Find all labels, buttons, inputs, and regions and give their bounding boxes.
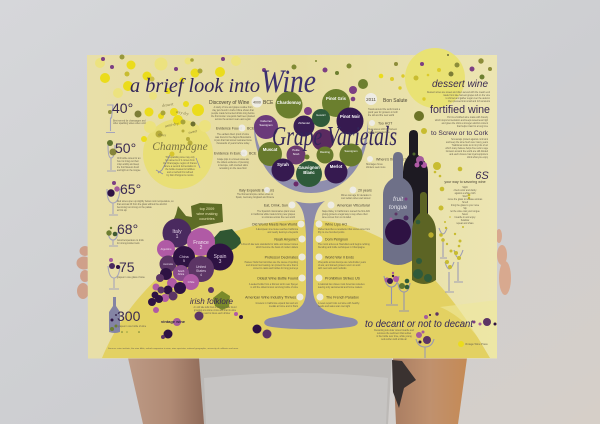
champagne section: dessert bbox=[162, 101, 175, 108]
temperature: 50 degrees: 50° bbox=[115, 140, 136, 156]
timeline: upper right near glass: Heat waves shift the harvest bbox=[368, 128, 397, 131]
timeline: left of stem: A European vine louse reaches California bbox=[256, 228, 299, 231]
timeline: left of stem bbox=[236, 187, 306, 308]
left hand bbox=[76, 246, 92, 299]
timeline: earliest wine history: The earliest direct proof of wine bbox=[217, 133, 250, 136]
timeline: upper right near glass: earlier across Europe bbox=[368, 131, 391, 134]
temperature: 50 degrees: Chill white wines for an bbox=[117, 157, 141, 160]
title: Wine bbox=[261, 64, 316, 100]
scattered bubbles top left bbox=[95, 54, 241, 156]
grape bubble: Petite Sirah: Sirah bbox=[293, 152, 300, 156]
green bottle bbox=[412, 192, 436, 284]
tasting chart on grey bottle: tongue bbox=[389, 205, 408, 211]
grape cluster of wine producing countries: Africa bbox=[178, 273, 185, 276]
timeline: right of stem: The monk arrives at Hautvillers and begins refining bbox=[318, 243, 370, 246]
timeline: earliest wine history: in Europe, with crushed skins bbox=[218, 164, 249, 167]
section: to screw or to cork: and keep the wine fresh over many years bbox=[446, 141, 489, 144]
temperature: 40 degrees: Best served for champagne and bbox=[113, 120, 146, 122]
timeline: upper right near glass: Shortages hit as bbox=[366, 163, 383, 166]
grape cluster of wine producing countries: South bbox=[178, 270, 185, 273]
decanting glass bbox=[416, 330, 434, 358]
grape cluster of wine producing countries: 2 bbox=[200, 245, 203, 251]
timeline: earliest wine history: in jars that had stored resinated wine bbox=[214, 139, 252, 142]
temperature: 65 degrees: becoming too strong on the palate bbox=[117, 206, 152, 209]
grape bubble: Cabernet Sauvignon: Cabernet bbox=[260, 119, 272, 123]
timeline: earliest wine history: clay jars found in Jiahu China shows that bbox=[212, 109, 254, 112]
section: 6S tasting steps: Sight bbox=[462, 186, 468, 189]
grape bubble: Sauvignon Blanc bbox=[296, 161, 322, 187]
grape cluster of wine producing countries: States bbox=[196, 269, 206, 273]
timeline: right of stem: blending and bottle techniques in Champagne bbox=[318, 246, 365, 249]
timeline: upper right near glass: Too HOT bbox=[378, 122, 393, 126]
champagne section: sweet bbox=[188, 128, 198, 135]
timeline: left of stem: Pasteur finds that microbes are the cause of spoiling bbox=[245, 261, 299, 264]
champagne section: doux bbox=[158, 131, 167, 138]
grape bubble: Pinot Noir bbox=[336, 108, 364, 134]
timeline: right of stem: American Viticultural bbox=[337, 204, 370, 208]
timeline: left of stem: A French law sets standards for table and dessert wines bbox=[241, 243, 299, 246]
timeline: earliest wine history: remaining on the cave floor bbox=[219, 167, 247, 170]
right hand bbox=[496, 229, 511, 295]
timeline: left of stem: and nearly destroys vineyards bbox=[267, 231, 299, 234]
timeline: right of stem: giving growers a legal way to say where their bbox=[322, 213, 368, 216]
temperature: 65 degrees: Red wines open up slightly below room temperature, so bbox=[117, 200, 174, 203]
temperature: 50 degrees: and light on the tongue bbox=[117, 169, 141, 172]
green bottle dots bbox=[413, 220, 434, 282]
section: fortified wine: which stops fermentation and keeps sweetness high bbox=[435, 119, 489, 122]
timeline: earliest wine history: BCE bbox=[247, 126, 255, 130]
section: 6S tasting steps: Sip bbox=[463, 208, 467, 210]
red wine glasses bbox=[384, 272, 410, 311]
grape bubble: Muscat: Muscat bbox=[263, 147, 278, 152]
section: to decant or not to decant bbox=[365, 312, 496, 341]
temperature: 75 degrees: 75 bbox=[119, 259, 135, 275]
timeline: left of stem: and shows how heating can protect the wine that is bbox=[246, 264, 299, 267]
grape bubble: Riesling: Riesling bbox=[320, 150, 330, 154]
grape bubble: Merlot: Merlot bbox=[330, 164, 343, 169]
timeline: earliest wine history: Discovery of Wine bbox=[209, 100, 250, 106]
grape bubble: Cabernet Sauvignon: Sauvignon bbox=[259, 123, 273, 127]
grape cluster of wine producing countries: China bbox=[179, 255, 189, 259]
timeline: right of stem: Wine Lips HO bbox=[325, 222, 347, 226]
section: 6S tasting steps: against a white cloth bbox=[455, 192, 476, 195]
section: to screw or to cork: to Screw or to Cork bbox=[431, 130, 489, 137]
timeline: right of stem: The French Paradox bbox=[326, 296, 359, 300]
grape bubble: Petite Sirah bbox=[286, 146, 306, 164]
timeline: right of stem: Vineyards across Europe are rebuilt after years bbox=[318, 261, 367, 264]
timeline: right of stem: fifty to one hundred points bbox=[318, 231, 345, 234]
flower cluster bbox=[412, 152, 427, 168]
champagne pale yellow circle bbox=[143, 119, 213, 189]
timeline: right of stem: Prohibition Strikes US bbox=[325, 276, 361, 280]
section: irish folklore: was said to bless each drinker bbox=[200, 312, 231, 315]
temperature: 50 degrees: crisp acidity and keep bbox=[117, 163, 140, 166]
yellow hill background bbox=[102, 220, 490, 358]
title: a brief look into bbox=[130, 75, 260, 97]
temperature: 65 degrees bbox=[107, 181, 174, 215]
tattoo bbox=[392, 360, 416, 408]
grape cluster of wine producing countries: Argentina bbox=[161, 248, 172, 251]
tasting chart on grey bottle: fruit bbox=[393, 197, 403, 203]
temperature: 40 degrees: 40° bbox=[112, 100, 133, 116]
temperature: 40 degrees bbox=[106, 100, 146, 132]
section: 6S tasting steps: Smell bbox=[462, 202, 468, 204]
timeline: earliest wine history: Evidence in Europe bbox=[214, 152, 245, 156]
grape bubble: Muscat bbox=[258, 142, 282, 166]
section: 6S tasting steps bbox=[444, 170, 489, 225]
temperature: 68 degrees: for strong-bodied reds bbox=[117, 242, 140, 245]
section: 6S tasting steps: Savor bbox=[462, 213, 468, 216]
timeline: earliest wine history: across the ancient near east region bbox=[215, 118, 252, 121]
champagne section: the Champagne region of France bbox=[163, 162, 198, 165]
section: fortified wine bbox=[430, 104, 490, 128]
timeline: right of stem: 20 years bbox=[358, 188, 372, 192]
temperature: 68 degrees: 68° bbox=[117, 221, 138, 237]
logo mark bbox=[458, 341, 488, 347]
grape bubble: Syrah: Syrah bbox=[277, 162, 289, 167]
grape bubble: Pinot Gris: Pinot Gris bbox=[326, 96, 347, 101]
grape bubble: Chardonnay: Chardonnay bbox=[277, 100, 302, 105]
temperature: 50 degrees bbox=[107, 140, 141, 172]
timeline: left of stem: Eat, Drink, Sun bbox=[264, 204, 288, 208]
timeline: earliest wine history: people made fermented drinks long before bbox=[211, 112, 255, 115]
timeline: right of stem: with new tools and methods bbox=[318, 267, 347, 270]
timeline: right of stem: A national ban closes most American wineries bbox=[318, 283, 365, 286]
timeline: right of stem: wine comes from on its label bbox=[322, 216, 351, 219]
section: to screw or to cork: which many believe helps fine reds to age bbox=[445, 147, 489, 150]
timeline: right of stem: A news report links red wine with healthy bbox=[318, 302, 360, 305]
timeline: right of stem: Wines can age for decades in bbox=[341, 194, 372, 197]
grape bubble: Zinfandel bbox=[294, 116, 314, 136]
poster sheet bbox=[87, 55, 497, 358]
champagne section: be named so if it comes from bbox=[165, 159, 195, 162]
timeline: upper right near glass bbox=[365, 93, 408, 169]
grape bubble: Sauvignon Blanc: Blanc bbox=[303, 170, 315, 175]
grape bubble: Pinot Noir: Pinot Noir bbox=[340, 114, 360, 119]
grape bubble: Sauvignon bbox=[340, 144, 362, 166]
bottle count: 300: 300 bbox=[117, 308, 141, 324]
section: vintage wine: vintage wine bbox=[161, 319, 186, 324]
grape bubble: Petite Sirah: Petite bbox=[292, 148, 300, 152]
section: to screw or to cork: Growers around the world are still divided bbox=[446, 150, 489, 153]
timeline: left of stem: The Roman Empire carries vines to bbox=[237, 193, 274, 196]
timeline: left of stem: which become the basis of modern labels bbox=[256, 246, 299, 249]
section: 6S tasting steps: check color and clarity bbox=[454, 189, 477, 192]
timeline: left of stem: is still the oldest known surviving bottle of wine bbox=[251, 286, 299, 289]
grape cluster of wine producing countries: 4 bbox=[200, 273, 202, 277]
temperature: 40 degrees: other sparkling wines when cold bbox=[113, 122, 146, 125]
timeline: earliest wine history: Grape pips in a Greek cave are bbox=[217, 158, 250, 161]
timeline: earliest wine history: 4000 bbox=[253, 100, 261, 104]
timeline: right of stem: cool cellars when well stored bbox=[341, 197, 371, 200]
timeline: left of stem: Noah Anyone? bbox=[274, 238, 298, 242]
timeline: right of stem bbox=[316, 186, 372, 308]
grape bubble: Merlot bbox=[324, 160, 348, 184]
map: top wine making countries: countries bbox=[199, 217, 215, 221]
title bbox=[130, 64, 316, 100]
grape bubble: Riesling bbox=[316, 146, 334, 164]
temperature: 68 degrees bbox=[106, 221, 145, 246]
map: top wine making countries: wine making bbox=[196, 212, 218, 216]
champagne section: and a method first refined bbox=[167, 171, 194, 174]
timeline: upper right near glass: Toasts around the world mark a bbox=[368, 108, 401, 111]
timeline: left of stem: American Wine Industry Thrives bbox=[245, 296, 296, 300]
grey bottle bbox=[383, 152, 413, 265]
grape bubble: Syrah bbox=[272, 158, 294, 182]
timeline: earliest wine history: the oldest evidence of pressing bbox=[217, 161, 250, 164]
timeline: left of stem: The Spanish missionaries plant vines bbox=[257, 210, 296, 213]
champagne section: by Dom Pérignon's monks bbox=[167, 174, 194, 177]
grape bubble: Gewurztraminer: Gewürz bbox=[316, 113, 326, 117]
temperature: 65 degrees: at first sip bbox=[117, 209, 128, 212]
person: arms and shirt bbox=[128, 358, 467, 424]
timeline: right of stem: Parker launches a newsletter that scores wine from bbox=[318, 228, 370, 231]
grape bubble: Zinfandel: Zinfandel bbox=[298, 121, 310, 125]
grape cluster of wine producing countries: 3 bbox=[219, 259, 222, 265]
temperature: 50 degrees: the fruit flavours fresh bbox=[117, 166, 140, 169]
timeline: left of stem: Oldest Wine Bottle Found bbox=[257, 276, 298, 280]
section: 6S tasting steps: let the wine coat your tongue bbox=[450, 210, 480, 213]
grape bubble: Sauvignon Blanc: Sauvignon bbox=[298, 165, 320, 170]
map: top wine making countries bbox=[170, 203, 241, 256]
section: fortified wine: that helps it last for a long time bbox=[457, 125, 489, 128]
timeline: earliest wine history: BCE bbox=[249, 152, 257, 156]
section: to decant or not to decant: in the bottle over time, while young bbox=[376, 335, 412, 338]
section: 6S tasting steps: repeat and share bbox=[456, 222, 474, 225]
section: to decant or not to decant: removes the sediment that settles bbox=[377, 332, 412, 335]
grape bubble: Cabernet Sauvignon bbox=[254, 115, 278, 139]
grape bubble: centre bbox=[312, 129, 334, 151]
loose grapes lower centre bbox=[234, 312, 272, 338]
section: irish folklore: An old tale tells how a wild vine was found bbox=[194, 306, 237, 309]
bottle count: 300 bbox=[109, 297, 147, 333]
heading: Grape Varietals: Grape Varietals bbox=[272, 121, 397, 151]
grape cluster of wine producing countries bbox=[148, 218, 234, 313]
scattered bubbles top right bbox=[262, 54, 492, 210]
champagne section: very dry bbox=[175, 109, 189, 116]
timeline: upper right near glass: good year for growers in both bbox=[368, 111, 399, 114]
section: to screw or to cork bbox=[431, 130, 489, 159]
section: 6S tasting steps: your way to savoring wine bbox=[444, 180, 486, 184]
map: top wine making countries: top 2009 bbox=[200, 207, 214, 211]
section: vintage wine bbox=[161, 312, 204, 339]
timeline: earliest wine history: thousands of years before today bbox=[217, 142, 250, 145]
section: to screw or to cork: and each closure has loyal supporters bbox=[449, 153, 489, 156]
timeline: earliest wine history: Evidence Found bbox=[216, 126, 242, 130]
section: fortified wine: fortified wine bbox=[430, 104, 490, 116]
timeline: left of stem: Old World Meets New World bbox=[252, 222, 297, 226]
temperature: 65 degrees: that aromas lift from the glass without the alcohol bbox=[117, 203, 167, 206]
timeline: left of stem: medals at home and in Paris bbox=[269, 305, 299, 308]
timeline: right of stem: hearts and sales soar overnight bbox=[318, 305, 350, 308]
section: to decant or not to decant: reds soften with a little air bbox=[381, 338, 407, 341]
section: fortified wine: and gives the drink a stronger alcohol content bbox=[442, 122, 488, 125]
timeline: right of stem: of war, and trained growers return to work bbox=[318, 264, 361, 267]
timeline: earliest wine history: the first known vineyards had been planted bbox=[211, 115, 256, 118]
grape bubble: Pinot Gris bbox=[322, 89, 350, 117]
section: dessert wine: to shrivel and gather sugar over the autumn bbox=[446, 97, 491, 100]
timeline: left of stem: Italy Expands Borders bbox=[239, 188, 274, 192]
section: 6S tasting steps: Swallow bbox=[461, 220, 470, 222]
grape cluster of wine producing countries: Spain bbox=[214, 254, 227, 260]
section: 6S tasting steps: breathe in and enjoy bbox=[455, 216, 476, 219]
timeline: right of stem: Dom Pérignon bbox=[325, 238, 348, 242]
bottles bbox=[383, 130, 436, 284]
grape cluster of wine producing countries: Italy bbox=[172, 229, 182, 235]
section: irish folklore: irish folklore bbox=[190, 296, 233, 306]
grape bubble: Chardonnay bbox=[276, 92, 302, 118]
section: to decant or not to decant: Decanting lets older wines breathe and bbox=[374, 329, 415, 332]
timeline: upper right near glass: drinkers seek more bbox=[366, 166, 386, 169]
grape cluster of wine producing countries: France bbox=[193, 240, 209, 246]
section: dessert wine: dessert wine bbox=[432, 78, 488, 90]
timeline: earliest wine history: BCE bbox=[263, 100, 274, 106]
grape cluster of wine producing countries: 1 bbox=[176, 234, 179, 240]
timeline: right of stem: World War II Ends bbox=[325, 256, 354, 260]
section: to screw or to cork: drink what you enjoy bbox=[467, 156, 489, 159]
grape cluster of wine producing countries: Chile bbox=[188, 280, 195, 284]
dark bottle bbox=[403, 130, 428, 245]
section: dessert wine: made from late-harvest grapes left on the vine bbox=[443, 94, 491, 97]
champagne section: This sparkling wine may only bbox=[165, 156, 196, 159]
section: 6S tasting steps: bring the glass to your nose bbox=[451, 204, 480, 207]
section: to screw or to cork: Traditional corks let in tiny bits of air bbox=[452, 144, 488, 147]
temperature: 68 degrees: Good temperature to drink bbox=[117, 239, 145, 242]
timeline: upper right near glass: Bon Salute bbox=[383, 98, 408, 104]
champagne section: the bottle creates its bubbles bbox=[165, 168, 195, 171]
timeline: left of stem: Growers in California expand fast and win bbox=[255, 302, 299, 305]
section: dessert wine: Dessert wines are sweet and often served with the meal's end bbox=[427, 91, 491, 94]
grape bubble: Gewurztraminer bbox=[312, 109, 330, 127]
temperature: 50 degrees: hour to bring out their bbox=[117, 160, 139, 163]
section: to decant or not to decant: to decant or not to decant bbox=[365, 319, 474, 330]
bottle count: 300: grapes in one bottle of wine bbox=[118, 325, 147, 328]
champagne section: semi-dry bbox=[164, 121, 179, 128]
section: dessert wine: then pressed into small and rich amounts bbox=[448, 100, 491, 103]
timeline: left of stem: to colonies across the new world bbox=[262, 216, 296, 219]
section: dessert wine bbox=[427, 78, 491, 103]
grape cluster of wine producing countries: United bbox=[196, 265, 206, 269]
footer credits: Sources: wine institute, the wine bible, oxford companion to wine, wine spectator, national geographic, university of california and more bbox=[108, 347, 239, 350]
timeline: left of stem: in California while traders bring new grapes bbox=[251, 213, 296, 216]
grape cluster of wine producing countries: 5 bbox=[183, 259, 185, 263]
timeline: earliest wine history: A study of rice and grape residue from bbox=[214, 106, 252, 109]
section: to screw or to cork: Screwcaps protect against cork taint bbox=[451, 138, 488, 141]
timeline: left of stem: Spain, Germany, England and France bbox=[236, 196, 275, 199]
timeline: upper right near glass: the old and the new world bbox=[368, 114, 395, 117]
champagne section: Champagne bbox=[152, 141, 208, 153]
tasting chart on grey bottle bbox=[385, 197, 411, 245]
timeline: left of stem: A sealed bottle from a Roman tomb near Speyer bbox=[249, 283, 298, 286]
temperature: 75 degrees bbox=[108, 258, 146, 289]
champagne section: where a second fermentation in bbox=[164, 165, 197, 168]
champagne flutes with bubbles bbox=[439, 216, 464, 292]
grape bubble: Sauvignon: Sauvignon bbox=[344, 149, 358, 153]
big pale yellow circle: dessert wine bbox=[405, 48, 465, 108]
section: fortified wine: Port is a fortified wine made with brandy bbox=[447, 116, 489, 119]
logo mark: Vintage Wine Press bbox=[465, 342, 488, 346]
timeline: right of stem: Napa Valley in California is named the first AVA bbox=[322, 210, 370, 213]
wine glass with grape varietals bbox=[254, 89, 368, 329]
section: irish folklore: growing at a stone cross and that its wine bbox=[194, 309, 237, 312]
timeline: earliest wine history: was found in the Zagros Mountains bbox=[215, 136, 252, 139]
section: irish folklore bbox=[190, 287, 237, 315]
temperature: 65 degrees: 65° bbox=[120, 181, 141, 197]
champagne section bbox=[152, 101, 208, 177]
temperature: 75 degrees: grapes in one glass of wine bbox=[117, 276, 146, 279]
section: 6S tasting steps: Swirl bbox=[463, 195, 468, 198]
timeline: earliest wine history bbox=[209, 96, 274, 170]
section: 6S tasting steps: 6S bbox=[475, 170, 489, 182]
timeline: left of stem: Professor Decimates bbox=[265, 256, 298, 260]
grape cluster of wine producing countries: Australia bbox=[163, 263, 173, 266]
section: 6S tasting steps: move the glass to release aromas bbox=[448, 198, 483, 201]
timeline: upper right near glass: 2011 bbox=[366, 97, 376, 102]
timeline: upper right near glass: Where's the Wine? bbox=[376, 158, 406, 162]
timeline: left of stem: stored in casks and bottles for long journeys bbox=[253, 267, 299, 270]
timeline: right of stem: leaving only sacramental and home makers bbox=[318, 286, 363, 289]
